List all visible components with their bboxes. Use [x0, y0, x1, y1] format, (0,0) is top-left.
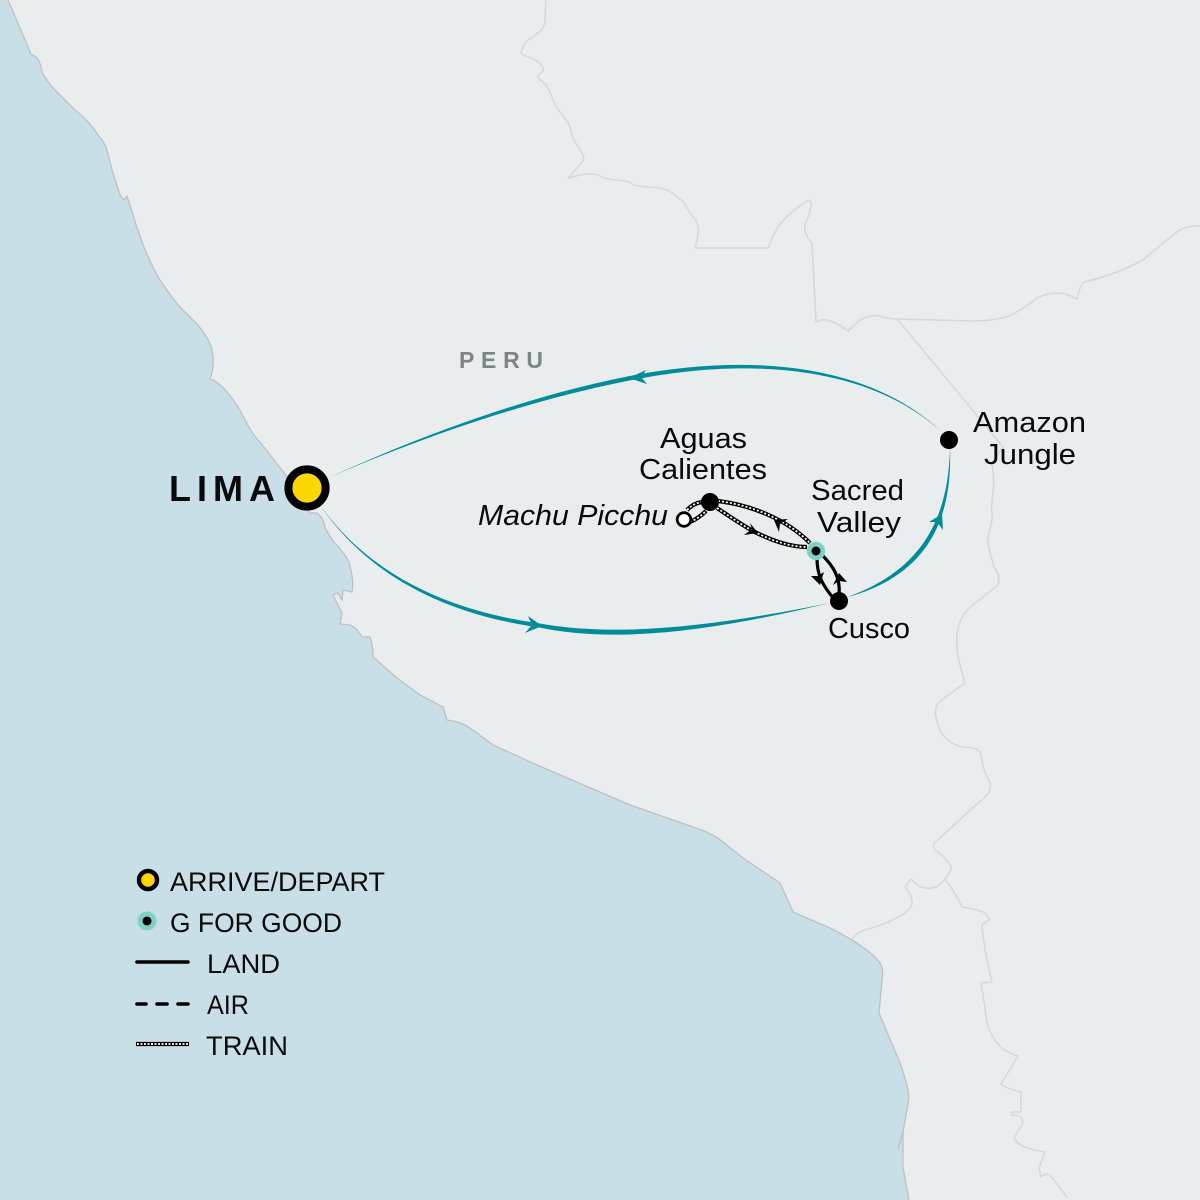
route: Cusco to Amazon [848, 448, 950, 597]
train arrowheads [744, 519, 788, 535]
legend text: arrive/depart: ARRIVE/DEPART [170, 867, 385, 897]
label: Sacred Valley [811, 475, 904, 539]
legend icon: G for Good [138, 912, 156, 930]
ocean fill [0, 0, 909, 1200]
legend icon: arrive/depart [139, 871, 157, 889]
label: Machu Picchu: Machu Picchu [478, 500, 668, 532]
country borders [521, 0, 1199, 1197]
label: Peru: PERU [459, 347, 543, 373]
arrowhead: Amazon to Lima [629, 370, 647, 384]
label: Sacred Valley: Valley [817, 507, 902, 539]
label: Aguas Calientes [639, 423, 767, 486]
legend icon: land [137, 960, 188, 964]
land route: Sacred Valley and Cusco [817, 556, 839, 600]
marker: Cusco [830, 592, 848, 610]
legend icon: train [136, 1042, 189, 1046]
legend text: G for Good: G FOR GOOD [170, 908, 342, 938]
marker: Sacred Valley [807, 542, 825, 560]
marker: Machu Picchu [677, 513, 691, 526]
train route: Aguas Calientes and Machu Picchu [687, 501, 810, 547]
label: Amazon Jungle: Amazon [973, 407, 1086, 439]
coastline [8, 0, 909, 1200]
legend text: train: TRAIN [206, 1031, 288, 1061]
label: Aguas Calientes: Calientes [639, 454, 767, 486]
route: Lima to Cusco [320, 505, 830, 635]
label: Aguas Calientes: Aguas [660, 423, 747, 455]
legend icon: air [137, 1002, 188, 1006]
label: Sacred Valley: Sacred [811, 475, 904, 507]
arrowhead: Cusco to Amazon [929, 514, 943, 530]
label: Amazon Jungle [973, 407, 1086, 471]
arrowhead: Lima to Cusco [525, 616, 542, 633]
legend text: land: LAND [207, 949, 280, 979]
marker: Amazon Jungle [940, 431, 958, 449]
marker: Lima [288, 469, 326, 507]
legend text: air: AIR [207, 990, 249, 1020]
land arrowheads [811, 572, 847, 585]
label: Cusco: Cusco [828, 613, 910, 645]
label: Amazon Jungle: Jungle [984, 439, 1076, 471]
legend [136, 867, 385, 1061]
marker: Aguas Calientes [701, 493, 719, 511]
label: Lima: LIMA [169, 468, 275, 509]
route: Amazon to Lima [328, 365, 942, 478]
